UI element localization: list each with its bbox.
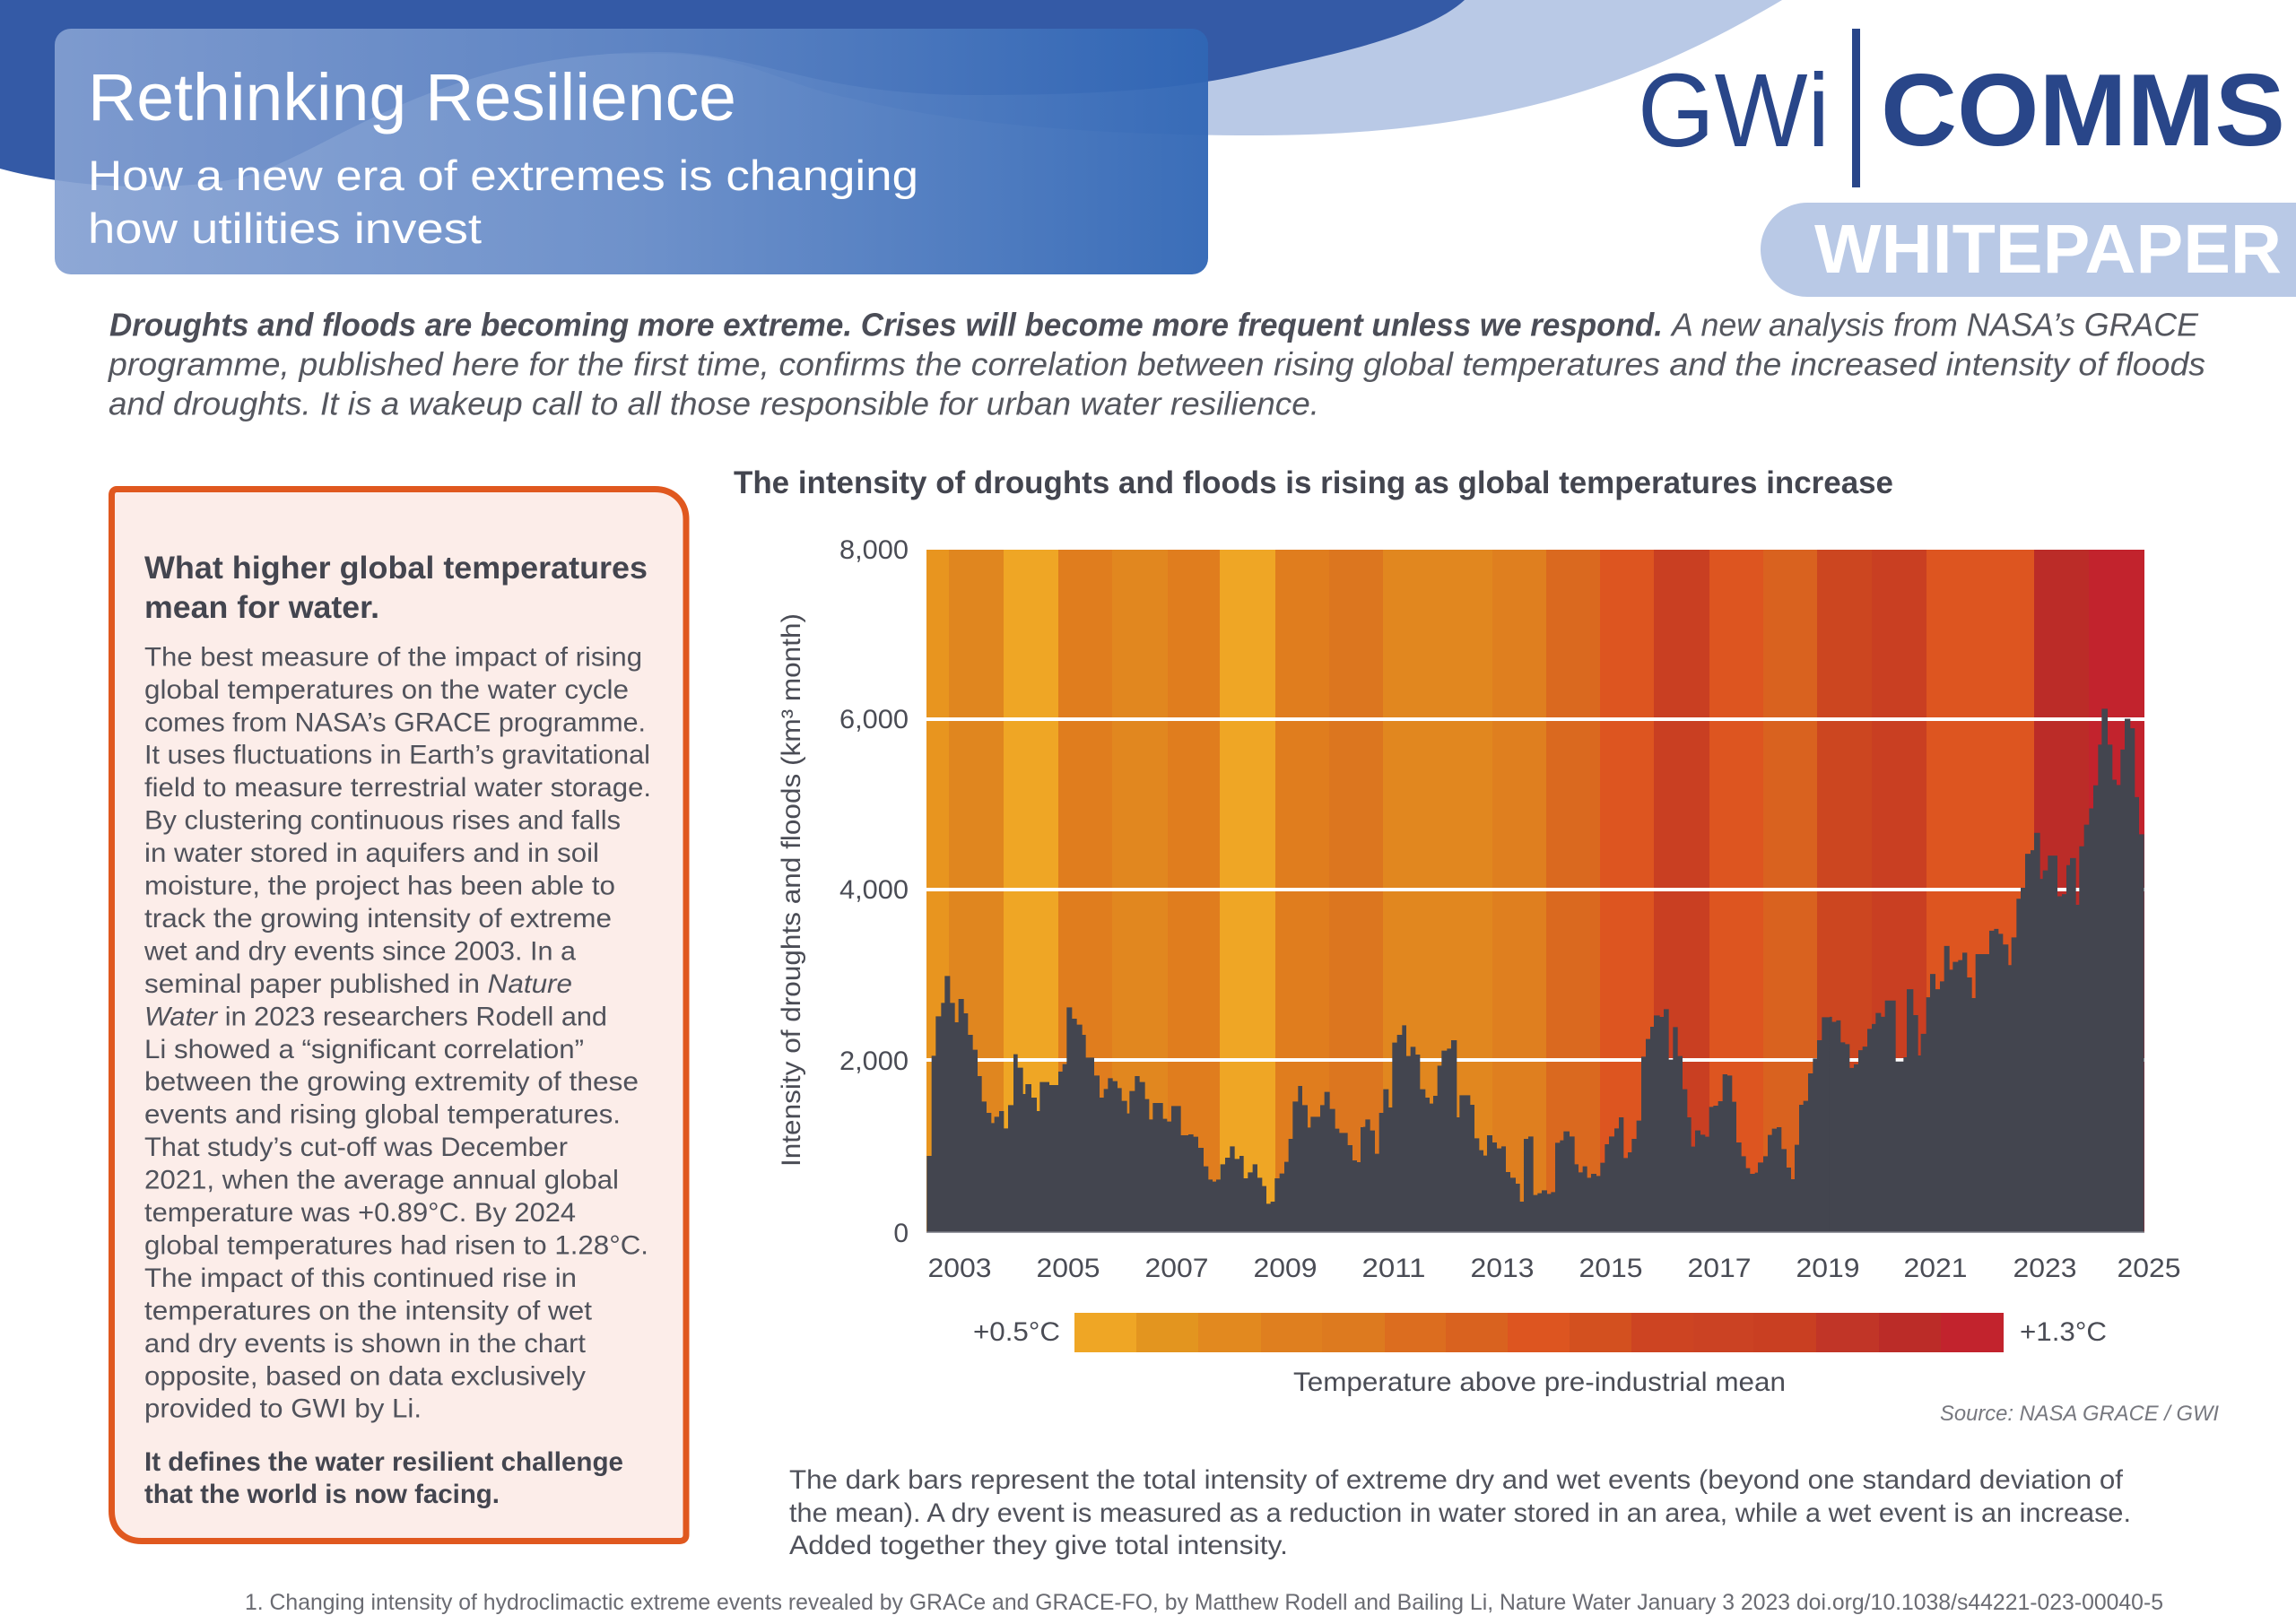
title: Rethinking Resilience	[88, 60, 736, 135]
x axis labels: 2023	[2013, 1254, 2077, 1283]
temperature year bands	[926, 550, 2144, 1232]
panel body text: global temperatures had risen to 1.28°C.	[144, 1230, 648, 1261]
panel body text: 2021, when the average annual global	[144, 1166, 619, 1195]
subtitle	[88, 152, 918, 252]
chart explanation: The dark bars represent the total intensity of extreme dry and wet events (beyond one standard deviation of	[789, 1465, 2124, 1495]
x axis labels: 2021	[1903, 1254, 1968, 1283]
x axis labels	[927, 1254, 2181, 1283]
panel body text: By clustering continuous rises and falls	[144, 806, 621, 836]
source note: Source: NASA GRACE / GWI	[1940, 1402, 2219, 1426]
panel body text: and dry events is shown in the chart	[144, 1329, 587, 1359]
panel body text: moisture, the project has been able to	[144, 872, 615, 900]
logo: GWI COMMS: COMMS	[1881, 54, 2285, 168]
panel body text	[144, 642, 651, 1424]
x axis labels: 2017	[1688, 1254, 1751, 1283]
panel body text: between the growing extremity of these	[144, 1067, 639, 1097]
temperature legend	[973, 1313, 2107, 1397]
x axis labels: 2025	[2117, 1254, 2181, 1283]
grid lines	[926, 717, 2144, 1062]
background wave: dark blue	[0, 0, 1465, 187]
panel body text: That study’s cut-off was December	[144, 1133, 568, 1162]
panel body text: events and rising global temperatures.	[144, 1100, 621, 1130]
chart explanation: Added together they give total intensity.	[789, 1531, 1288, 1560]
y axis labels: 0	[893, 1219, 909, 1248]
whitepaper badge	[1761, 203, 2296, 297]
background wave: light blue	[538, 0, 1782, 135]
panel body text: field to measure terrestrial water storage.	[144, 773, 651, 803]
panel heading	[144, 551, 648, 625]
panel heading: What higher global temperatures	[144, 551, 648, 586]
chart: drought and flood intensity	[777, 535, 2181, 1283]
x axis labels: 2007	[1144, 1254, 1209, 1283]
intro text: programme, published here for the first time, confirms the correlation between rising global temperatures and the increased intensity of floods	[108, 346, 2205, 382]
x axis labels: 2011	[1361, 1254, 1426, 1283]
panel body text: track the growing intensity of extreme	[144, 904, 612, 934]
panel heading: mean for water.	[144, 590, 379, 625]
panel body text: in water stored in aquifers and in soil	[144, 838, 599, 868]
panel body text: Water in 2023 researchers Rodell and	[144, 1002, 607, 1031]
logo: GWI COMMS	[1638, 29, 2285, 187]
panel body text: It uses fluctuations in Earth’s gravitational	[144, 741, 650, 770]
x axis labels: 2013	[1471, 1254, 1534, 1283]
intro text	[108, 307, 2205, 421]
legend minimum label: +0.5°C	[973, 1317, 1060, 1347]
x axis labels: 2015	[1578, 1254, 1643, 1283]
subtitle: how utilities invest	[88, 204, 482, 252]
chart title: The intensity of droughts and floods is rising as global temperatures increase	[734, 465, 1893, 500]
legend maximum label: +1.3°C	[2020, 1317, 2107, 1347]
x axis labels: 2003	[927, 1254, 992, 1283]
panel body text: opposite, based on data exclusively	[144, 1361, 586, 1391]
panel body text: wet and dry events since 2003. In a	[144, 936, 576, 966]
subtitle: How a new era of extremes is changing	[88, 152, 918, 199]
title panel	[55, 29, 1208, 274]
x axis labels: 2019	[1796, 1254, 1860, 1283]
intro text: A new analysis from NASA’s GRACE	[1670, 307, 2199, 343]
panel body text: The impact of this continued rise in	[144, 1264, 577, 1293]
panel body text: seminal paper published in Nature	[144, 969, 572, 999]
y axis labels: 8,000	[839, 535, 909, 565]
panel body text: global temperatures on the water cycle	[144, 675, 629, 705]
y axis labels: 2,000	[839, 1046, 909, 1076]
chart explanation	[789, 1465, 2131, 1560]
logo: GWI COMMS: GWi	[1638, 52, 1830, 169]
x axis labels: 2005	[1037, 1254, 1100, 1283]
chart explanation: the mean). A dry event is measured as a reduction in water stored in an area, while a wet event is an increase.	[789, 1498, 2131, 1528]
panel: what higher global temperatures mean for water	[111, 490, 686, 1541]
intro text: Droughts and floods are becoming more extreme. Crises will become more frequent unless we respond.	[109, 307, 1663, 343]
y axis labels	[839, 535, 909, 1248]
y axis title: Intensity of droughts and floods (km³ month)	[777, 613, 806, 1167]
panel body text: temperature was +0.89°C. By 2024	[144, 1198, 576, 1228]
panel conclusion: that the world is now facing.	[144, 1480, 500, 1509]
y axis labels: 6,000	[839, 705, 909, 734]
panel body text: temperatures on the intensity of wet	[144, 1296, 593, 1325]
y axis labels: 4,000	[839, 875, 909, 905]
panel body text: provided to GWI by Li.	[144, 1394, 422, 1424]
panel body text: comes from NASA’s GRACE programme.	[144, 708, 646, 737]
panel conclusion	[144, 1447, 623, 1509]
panel body text: The best measure of the impact of rising	[144, 642, 642, 672]
footnote: 1. Changing intensity of hydroclimactic extreme events revealed by GRACe and GRACE-FO, by Matthew Rodell and Bailing Li, Nature Water January 3 2023 doi.org/10.1038/s44221-023-00040-5	[245, 1590, 2163, 1615]
panel conclusion: It defines the water resilient challenge	[144, 1447, 623, 1477]
panel body text: Li showed a “significant correlation”	[144, 1035, 584, 1064]
x axis labels: 2009	[1254, 1254, 1317, 1283]
dark intensity bars	[926, 708, 2144, 1233]
legend caption: Temperature above pre-industrial mean	[1293, 1368, 1786, 1397]
whitepaper badge: WHITEPAPER	[1814, 211, 2282, 288]
intro text: and droughts. It is a wakeup call to all those responsible for urban water resilience.	[109, 386, 1319, 421]
legend colour scale	[1074, 1313, 2004, 1352]
